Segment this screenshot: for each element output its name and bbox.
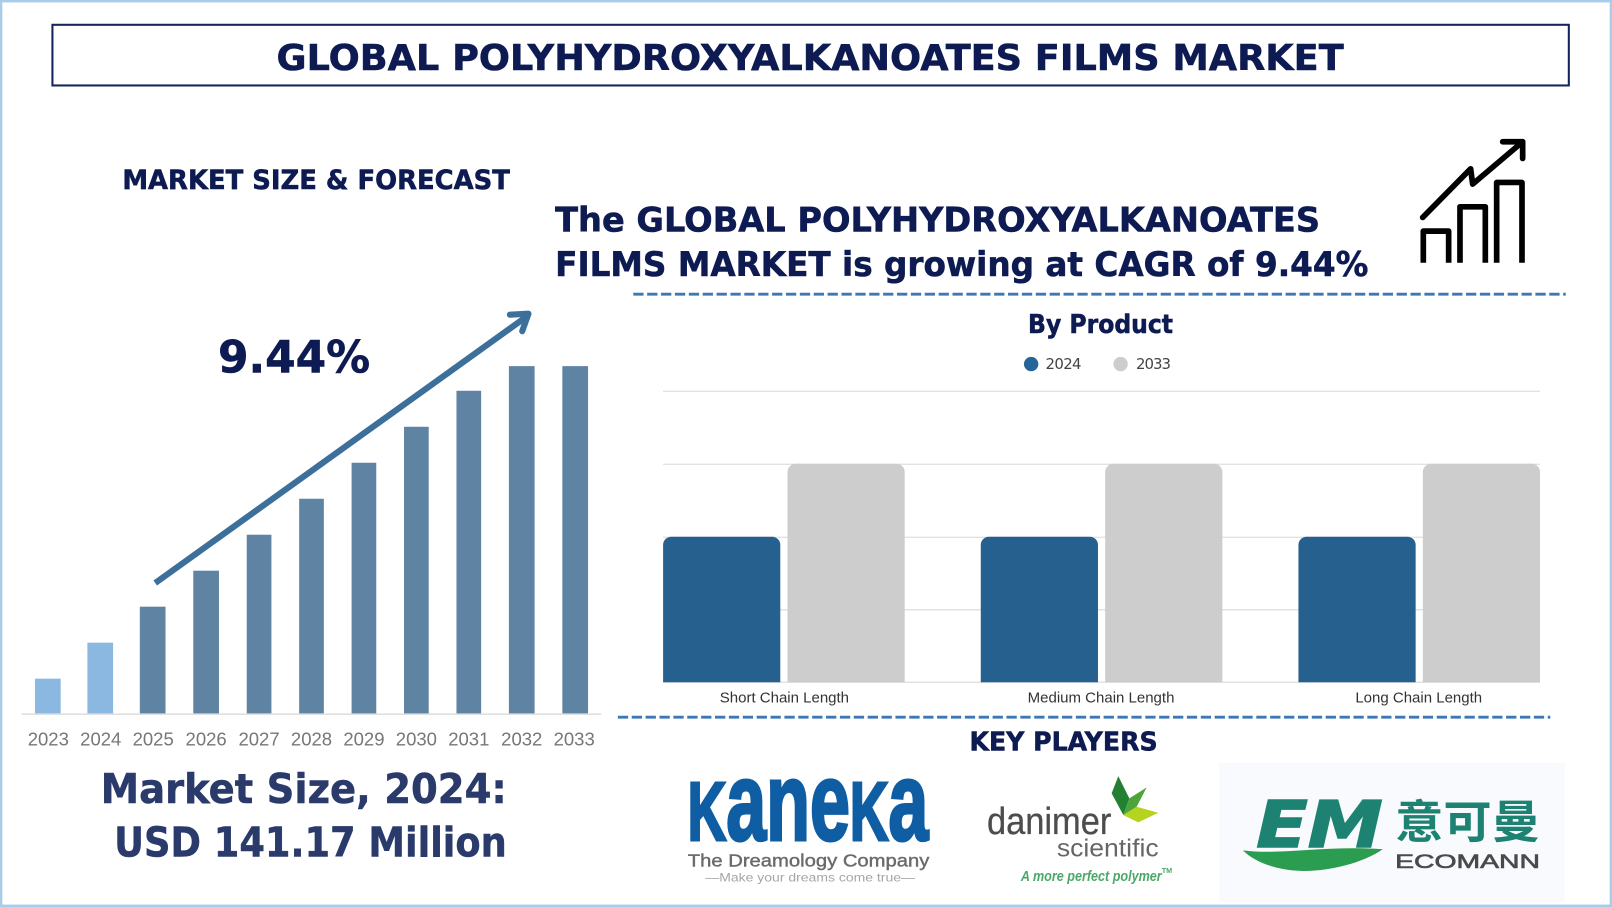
legend: 2033 bbox=[1136, 355, 1171, 373]
bar chart: market size forecast: 2025 bbox=[133, 728, 174, 749]
logo: Danimer Scientific bbox=[987, 776, 1172, 885]
bar chart: market size forecast: 2032 bbox=[501, 728, 542, 749]
bar chart: market size forecast: 2026 bbox=[186, 728, 227, 749]
heading: by product: By Product bbox=[1028, 310, 1173, 340]
logo: Danimer Scientific: A more perfect polymer bbox=[1020, 869, 1163, 885]
title: GLOBAL POLYHYDROXYALKANOATES FILMS MARKET bbox=[277, 38, 1344, 79]
bar chart: market size forecast: 2033 bbox=[554, 728, 595, 749]
heading: key players: KEY PLAYERS bbox=[969, 728, 1158, 758]
heading: market size and forecast: MARKET SIZE & FORECAST bbox=[122, 165, 511, 196]
logo: Ecomann bbox=[1219, 763, 1565, 903]
logo: Danimer Scientific: danimer bbox=[987, 801, 1112, 843]
bar chart: market size forecast: 2031 bbox=[448, 728, 489, 749]
divider: lower dashed line bbox=[618, 716, 1550, 719]
bar chart: market size forecast: 2023 bbox=[28, 728, 69, 749]
bar chart: market size forecast: 2028 bbox=[291, 728, 332, 749]
text block: market size 2024: USD 141.17 Million bbox=[114, 819, 507, 867]
text block: market size 2024 bbox=[101, 765, 507, 866]
arrow: growth trend bbox=[155, 314, 528, 583]
logo: Kaneka: KaneKa bbox=[688, 739, 929, 864]
divider: top dashed line bbox=[633, 293, 1566, 296]
logo: Danimer Scientific: TM bbox=[1162, 866, 1172, 875]
logo: Kaneka: —Make your dreams come true— bbox=[705, 871, 915, 885]
bar chart: market size forecast: 2024 bbox=[80, 728, 121, 749]
logo: Ecomann: 意可曼 bbox=[1395, 797, 1540, 848]
title bbox=[52, 25, 1569, 85]
bar chart: by product: Long Chain Length bbox=[1355, 689, 1482, 706]
bar chart: market size forecast: 2027 bbox=[238, 728, 280, 749]
logo: Ecomann: ECOMANN bbox=[1395, 851, 1540, 873]
bar chart: by product: Short Chain Length bbox=[720, 689, 849, 706]
icon: growth chart bbox=[1423, 142, 1523, 263]
CAGR value: 9.44% bbox=[218, 332, 370, 383]
logo: Danimer Scientific: scientific bbox=[1057, 835, 1159, 862]
bar chart: market size forecast bbox=[22, 366, 601, 749]
bar chart: by product bbox=[663, 391, 1540, 706]
text block: CAGR statement: FILMS MARKET is growing at CAGR of 9.44% bbox=[555, 245, 1368, 284]
bar chart: by product: Medium Chain Length bbox=[1028, 689, 1174, 706]
text block: CAGR statement bbox=[555, 200, 1368, 284]
legend bbox=[1024, 355, 1171, 373]
legend: 2024 bbox=[1046, 355, 1082, 373]
bar chart: market size forecast: 2029 bbox=[343, 728, 385, 749]
logo: Kaneka: The Dreamology Company bbox=[688, 850, 930, 870]
logo: Ecomann: EM bbox=[1256, 789, 1383, 863]
bar chart: market size forecast: 2030 bbox=[396, 728, 437, 749]
text block: CAGR statement: The GLOBAL POLYHYDROXYALKANOATES bbox=[555, 200, 1320, 239]
text block: market size 2024: Market Size, 2024: bbox=[101, 765, 507, 813]
